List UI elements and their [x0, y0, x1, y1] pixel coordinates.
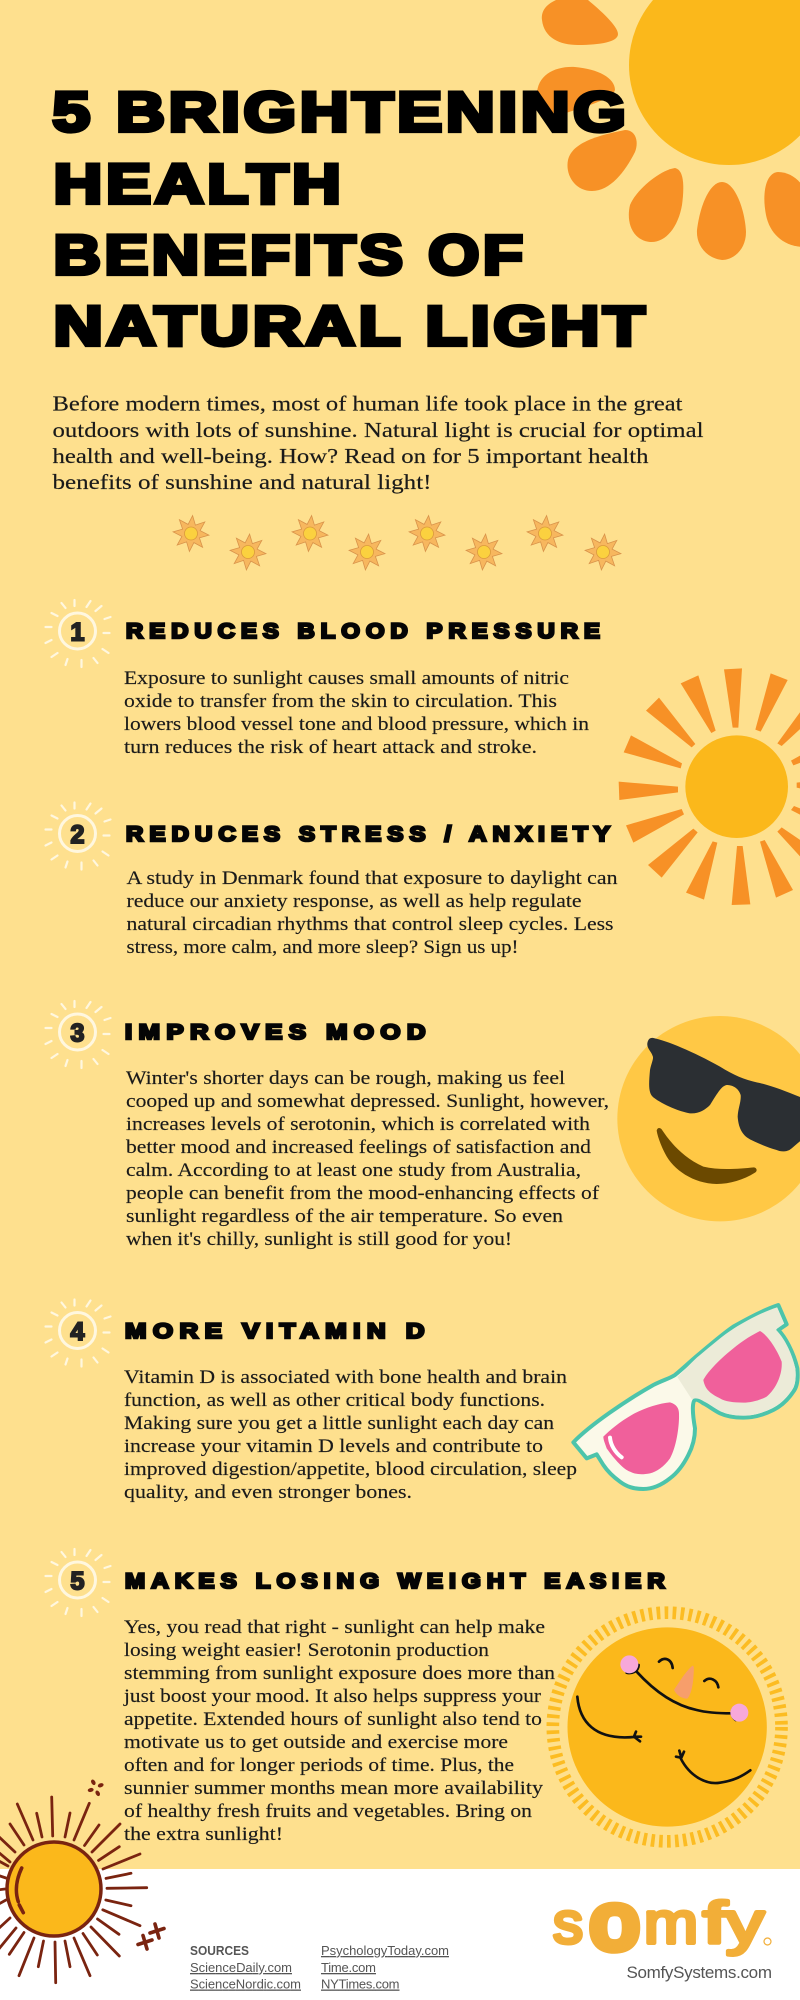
body 1 [124, 668, 590, 758]
logo: somfy: m [644, 1891, 698, 1956]
icon: hugging sun face [553, 1613, 781, 1841]
footer panel [0, 1869, 800, 2000]
body 1: Exposure to sunlight causes small amounts of nitric [124, 668, 569, 689]
logo: somfy: o [591, 1877, 639, 1965]
body 2: reduce our anxiety response, as well as help regulate [126, 891, 582, 912]
icon: smiley with sunglasses [617, 1016, 800, 1221]
body 3: better mood and increased feelings of satisfaction and [126, 1137, 592, 1158]
badge 3 [46, 1001, 110, 1068]
badge 4: 4 [71, 1318, 85, 1346]
section 2 [46, 802, 618, 958]
body 2 [126, 868, 618, 958]
title: BENEFITS OF [54, 224, 526, 286]
section 3 [46, 1001, 609, 1250]
title: 5 BRIGHTENING [52, 81, 630, 143]
body 4: Making sure you get a little sunlight each day can [124, 1413, 555, 1434]
badge 2 [46, 802, 110, 870]
heading 4: MORE VITAMIN D [125, 1319, 431, 1343]
body 3 [126, 1068, 609, 1250]
body 5 [123, 1617, 556, 1845]
sources: ScienceDaily.com [190, 1960, 292, 1975]
body 3: increases levels of serotonin, which is correlated with [126, 1114, 591, 1135]
body 4: improved digestion/appetite, blood circulation, sleep [124, 1459, 577, 1480]
body 5: Yes, you read that right - sunlight can help make [124, 1617, 545, 1638]
body 4: function, as well as other critical body functions. [124, 1390, 545, 1411]
section 5 [46, 1549, 671, 1845]
badge 5 [46, 1549, 110, 1616]
icon: pink sunglasses [573, 1305, 798, 1489]
logo: somfy: s [553, 1891, 583, 1956]
intro text: health and well-being. How? Read on for 5 important health [52, 444, 649, 468]
body 2: A study in Denmark found that exposure to daylight can [126, 868, 618, 889]
icon: small dots [87, 1779, 104, 1797]
body 3: calm. According to at least one study from Australia, [126, 1160, 581, 1181]
logo: somfy: f [703, 1891, 728, 1956]
logo: somfy: SomfySystems.com [626, 1963, 772, 1982]
badge 5: 5 [71, 1568, 85, 1596]
sources: PsychologyToday.com [321, 1943, 449, 1958]
body 4: Vitamin D is associated with bone health and brain [124, 1367, 568, 1388]
body 3: sunlight regardless of the air temperature. So even [126, 1206, 564, 1227]
body 5: sunnier summer months mean more availability [124, 1778, 544, 1799]
sources [190, 1943, 449, 1992]
sources: NYTimes.com [321, 1976, 400, 1992]
icon: outlined sun bottom left [0, 1779, 164, 1983]
icon: sun with straight rays [619, 668, 800, 905]
body 5: of healthy fresh fruits and vegetables. Bring on [124, 1801, 533, 1822]
title: HEALTH [54, 153, 344, 215]
sources: SOURCES [190, 1943, 249, 1958]
body 5: the extra sunlight! [124, 1824, 283, 1845]
body 5: stemming from sunlight exposure does more than [124, 1663, 556, 1684]
heading 2: REDUCES STRESS / ANXIETY [126, 822, 616, 846]
body 1: oxide to transfer from the skin to circulation. This [124, 691, 557, 712]
badge 1 [46, 600, 110, 667]
sources: Time.com [321, 1960, 376, 1975]
body 3: cooped up and somewhat depressed. Sunlight, however, [126, 1091, 609, 1112]
logo: somfy: y [726, 1891, 764, 1956]
badge 1: 1 [71, 618, 85, 646]
row of small suns [173, 516, 621, 570]
body 4: increase your vitamin D levels and contribute to [124, 1436, 543, 1457]
icon: small crosses [138, 1924, 164, 1949]
badge 3: 3 [71, 1020, 84, 1048]
heading 5: MAKES LOSING WEIGHT EASIER [125, 1569, 671, 1593]
body 2: stress, more calm, and more sleep? Sign us up! [126, 937, 518, 958]
body 5: motivate us to get outside and exercise more [124, 1732, 508, 1753]
icon: large sun top right [537, 0, 800, 260]
body 5: losing weight easier! Serotonin production [124, 1640, 490, 1661]
section 1 [46, 600, 606, 758]
badge 2: 2 [71, 821, 84, 849]
body 5: appetite. Extended hours of sunlight also tend to [124, 1709, 542, 1730]
body 4: quality, and even stronger bones. [124, 1482, 412, 1503]
intro text: Before modern times, most of human life took place in the great [52, 392, 683, 416]
body 5: just boost your mood. It also helps suppress your [123, 1686, 542, 1707]
body 5: often and for longer periods of time. Plus, the [124, 1755, 514, 1776]
body 2: natural circadian rhythms that control sleep cycles. Less [126, 914, 614, 935]
body 3: when it's chilly, sunlight is still good for you! [126, 1229, 512, 1250]
heading 1: REDUCES BLOOD PRESSURE [126, 619, 606, 643]
badge 4 [46, 1300, 110, 1366]
logo: somfy [553, 1877, 772, 1982]
body 1: lowers blood vessel tone and blood pressure, which in [124, 714, 590, 735]
heading 3: IMPROVES MOOD [125, 1020, 432, 1044]
title [52, 81, 648, 357]
intro text [52, 392, 704, 494]
intro text: outdoors with lots of sunshine. Natural light is crucial for optimal [52, 418, 704, 442]
body 4 [124, 1367, 577, 1503]
title: NATURAL LIGHT [54, 295, 648, 357]
body 1: turn reduces the risk of heart attack and stroke. [124, 737, 537, 758]
intro text: benefits of sunshine and natural light! [52, 470, 432, 494]
body 3: Winter's shorter days can be rough, making us feel [126, 1068, 565, 1089]
sources: ScienceNordic.com [190, 1976, 301, 1992]
section 4 [46, 1300, 577, 1503]
body 3: people can benefit from the mood-enhancing effects of [126, 1183, 600, 1204]
